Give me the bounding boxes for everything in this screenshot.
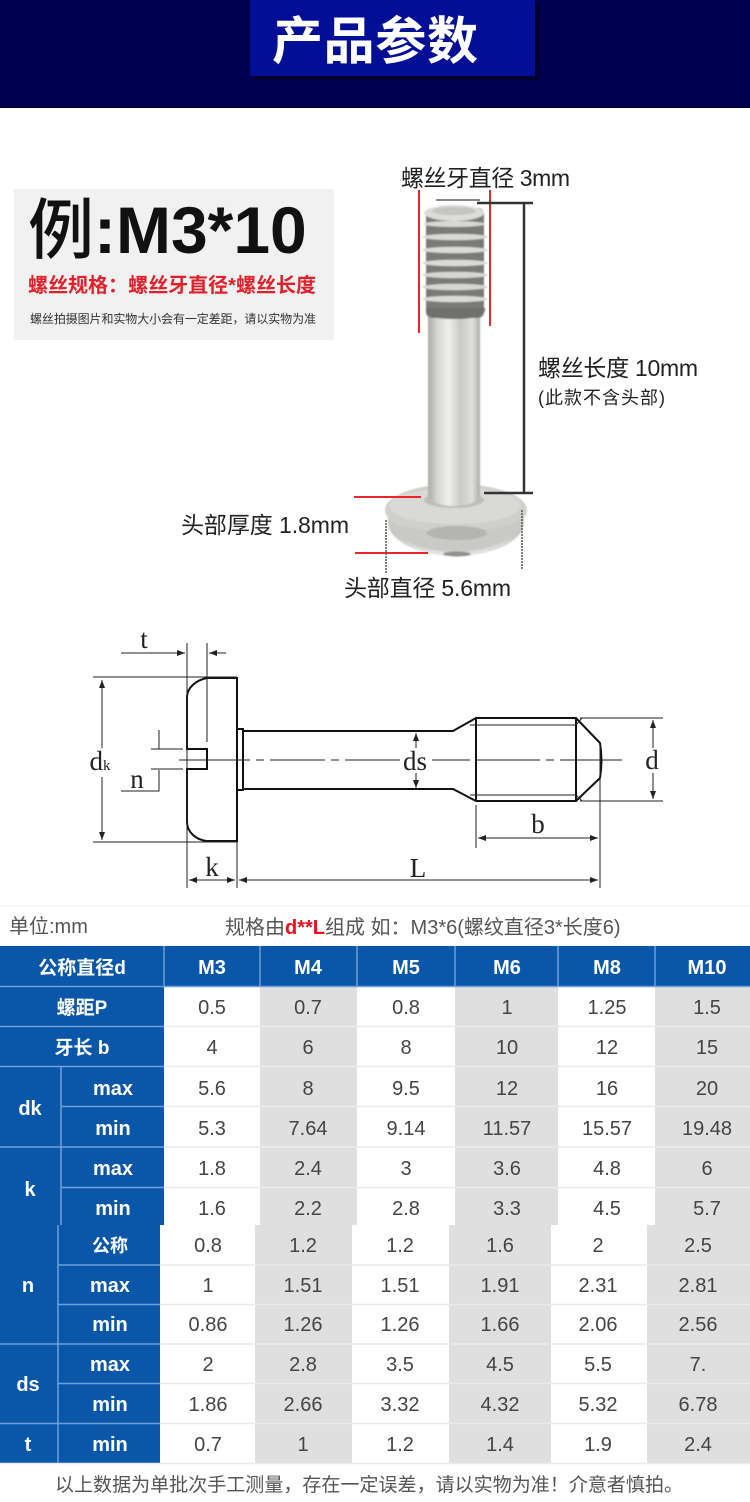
row: n max: 1: [202, 1275, 214, 1297]
header row: M6: [493, 957, 521, 979]
row: n min: min: [92, 1314, 128, 1336]
disclaimer note: 螺丝拍摄图片和实物大小会有一定差距，请以实物为准: [30, 311, 316, 326]
row: ds min: 3.32: [381, 1394, 419, 1416]
row: dk max: 12: [496, 1078, 518, 1100]
row: ds max: 4.5: [486, 1354, 514, 1376]
row: n nominal: 2.5: [684, 1235, 712, 1257]
row: thread length: 4: [206, 1037, 218, 1059]
row: t min: [25, 1434, 712, 1456]
dimension arrows: [102, 653, 653, 880]
row: pitch: 1.25: [588, 997, 626, 1019]
label: head thickness: 头部厚度 1.8mm: [181, 512, 349, 538]
row: t min: 1: [297, 1434, 309, 1456]
row: thread length: 8: [400, 1037, 412, 1059]
row: dk min: 9.14: [387, 1118, 425, 1140]
row: dk min: 7.64: [289, 1118, 327, 1140]
row: ds max: [16, 1354, 706, 1396]
example heading: 例:M3*10: [28, 193, 307, 267]
spec table: upper: [0, 946, 750, 1225]
row: t min: 1.4: [486, 1434, 514, 1456]
row: ds min: 5.32: [579, 1394, 617, 1416]
row: n min: 1.66: [481, 1314, 519, 1336]
label: screw length: 螺丝长度 10mm: [538, 355, 698, 381]
row: ds max: max: [90, 1354, 130, 1376]
title box: 产品参数: [272, 0, 478, 74]
row: thread length: 15: [696, 1037, 718, 1059]
row: thread length: 6: [302, 1037, 314, 1059]
row: ds min: 1.86: [189, 1394, 227, 1416]
row: ds max: 7.: [690, 1354, 706, 1376]
label: head diameter: 头部直径 5.6mm: [344, 575, 511, 601]
row: dk max: 9.5: [392, 1078, 420, 1100]
row: t min: t: [25, 1434, 32, 1456]
row: ds min: 2.66: [284, 1394, 322, 1416]
row: thread length: 12: [596, 1037, 618, 1059]
row: ds min: 6.78: [679, 1394, 717, 1416]
row: k min: 4.5: [593, 1198, 621, 1220]
header row: M10: [688, 957, 726, 979]
spec formula: 螺丝规格：螺丝牙直径*螺丝长度: [28, 274, 316, 297]
table caption: [0, 906, 750, 939]
row: dk max: 16: [596, 1078, 618, 1100]
row: n min: 0.86: [189, 1314, 227, 1336]
row: n nominal: 0.8: [194, 1235, 222, 1257]
spec table: lower: [0, 1225, 750, 1464]
row: k max: 3.6: [493, 1158, 521, 1180]
spec composition note: 规格由d**L组成 如：M3*6(螺纹直径3*长度6): [225, 916, 621, 939]
row: k min: 2.8: [392, 1198, 420, 1220]
row: t min: min: [92, 1434, 128, 1456]
row: n max: 2.31: [579, 1275, 617, 1297]
row: dk min: 5.3: [198, 1118, 226, 1140]
dimension letters: L: [410, 853, 426, 883]
row: n nominal: 1.2: [289, 1235, 317, 1257]
row: n nominal: 1.2: [386, 1235, 414, 1257]
row: dk min: 19.48: [682, 1118, 732, 1140]
row: k min: [95, 1198, 721, 1220]
row: dk min: 11.57: [483, 1118, 531, 1140]
row: dk max: 8: [302, 1078, 314, 1100]
row: n min: 2.06: [579, 1314, 617, 1336]
row: t min: 1.2: [386, 1434, 414, 1456]
row: n max: n: [22, 1275, 34, 1297]
row: dk min: min: [95, 1118, 131, 1140]
row: k max: 6: [701, 1158, 713, 1180]
row: pitch: 0.7: [294, 997, 322, 1019]
thin construction lines: [93, 643, 663, 888]
row: dk max: dk: [18, 1098, 43, 1120]
thread: [422, 205, 488, 319]
dimension letters: k: [205, 852, 219, 882]
row: ds max: 2: [202, 1354, 214, 1376]
header row: M3: [198, 957, 226, 979]
row: n nominal: [92, 1235, 712, 1257]
row: dk min: 15.57: [582, 1118, 632, 1140]
row: ds min: min: [92, 1394, 128, 1416]
row: pitch: 1.5: [693, 997, 721, 1019]
row: n max: 1.51: [381, 1275, 419, 1297]
row: pitch: 螺距P: [57, 997, 108, 1019]
row: k max: 2.4: [294, 1158, 322, 1180]
row: thread length: 10: [496, 1037, 518, 1059]
dimension letters: ds: [403, 746, 427, 776]
row: ds min: 4.32: [481, 1394, 519, 1416]
row: t min: 2.4: [684, 1434, 712, 1456]
dimension letters: n: [130, 764, 144, 794]
screw head: [385, 480, 527, 556]
row: pitch: 0.5: [198, 997, 226, 1019]
header row: M4: [294, 957, 323, 979]
row: n nominal: 公称: [92, 1236, 128, 1256]
dimension letters: t: [140, 624, 148, 654]
technical drawing: [90, 624, 663, 888]
row: k min: 3.3: [493, 1198, 521, 1220]
row: dk max: 5.6: [198, 1078, 226, 1100]
dimension letters: dk: [90, 746, 111, 776]
dimension letters: b: [531, 809, 545, 839]
row: ds max: ds: [16, 1374, 40, 1396]
row: dk max: 20: [696, 1078, 718, 1100]
row: n min: [92, 1314, 717, 1336]
row: k max: [24, 1158, 713, 1201]
header row: M5: [392, 957, 420, 979]
panel: size example: [14, 189, 334, 340]
row: ds max: 2.8: [289, 1354, 317, 1376]
header row: M8: [593, 957, 621, 979]
row: n min: 1.26: [381, 1314, 419, 1336]
row: ds min: [92, 1394, 717, 1416]
row: thread length: [55, 1037, 718, 1059]
annotation lines: [354, 190, 533, 573]
row: pitch: 0.8: [392, 997, 420, 1019]
row: ds max: 5.5: [584, 1354, 612, 1376]
header row: 公称直径d: [38, 957, 126, 979]
row: k min: 5.7: [693, 1198, 721, 1220]
row: k max: k: [24, 1179, 36, 1201]
row: n max: 2.81: [679, 1275, 717, 1297]
row: t min: 0.7: [194, 1434, 222, 1456]
row: n max: 1.51: [284, 1275, 322, 1297]
row: k min: 1.6: [198, 1198, 226, 1220]
row: k max: 3: [400, 1158, 412, 1180]
row: k max: 1.8: [198, 1158, 226, 1180]
row: n max: [22, 1275, 717, 1297]
row: n max: max: [90, 1275, 130, 1297]
unit label: 单位:mm: [9, 915, 88, 938]
row: pitch: [57, 997, 721, 1019]
footer note: 以上数据为单批次手工测量，存在一定误差，请以实物为准！介意者慎拍。: [55, 1474, 683, 1496]
dimension letters: d: [645, 745, 659, 775]
row: k max: 4.8: [593, 1158, 621, 1180]
row: thread length: 牙长 b: [55, 1037, 109, 1059]
row: k min: min: [95, 1198, 131, 1220]
row: n min: 2.56: [679, 1314, 717, 1336]
row: k min: 2.2: [294, 1198, 322, 1220]
label: thread diameter: 螺丝牙直径 3mm: [401, 165, 570, 191]
row: t min: 1.9: [584, 1434, 612, 1456]
screw outline: [187, 678, 602, 841]
row: dk max: max: [93, 1078, 133, 1100]
row: dk max: [18, 1078, 718, 1120]
shaft: [428, 316, 480, 496]
row: pitch: 1: [501, 997, 513, 1019]
row: n max: 1.91: [481, 1275, 519, 1297]
row: n nominal: 1.6: [486, 1235, 514, 1257]
label: excludes head: (此款不含头部): [538, 388, 665, 408]
row: n min: 1.26: [284, 1314, 322, 1336]
dimension letters: [90, 624, 659, 883]
row: ds max: 3.5: [386, 1354, 414, 1376]
row: k max: max: [93, 1158, 133, 1180]
screw photo: [385, 205, 527, 556]
header row: [38, 957, 726, 979]
row: n nominal: 2: [592, 1235, 604, 1257]
row: dk min: [95, 1118, 732, 1140]
header band: [0, 0, 750, 108]
